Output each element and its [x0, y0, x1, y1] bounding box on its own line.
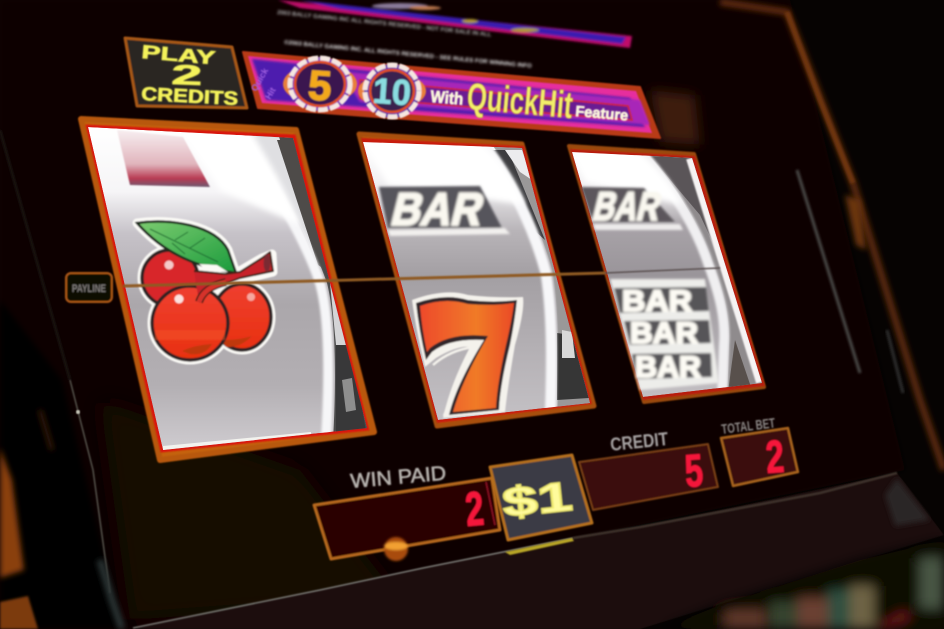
reel window 3: bars [569, 146, 770, 402]
payline [123, 268, 720, 286]
total bet meter: 2 [764, 430, 786, 483]
bar symbol, reel 3: BAR [589, 184, 666, 229]
small top banner [278, 0, 632, 48]
total bet meter [721, 428, 798, 486]
play 2 credits badge: PLAY [141, 42, 217, 69]
total bet label: TOTAL BET [720, 414, 776, 437]
credit meter: 5 [683, 444, 705, 497]
win paid meter: 2 [463, 483, 486, 537]
one dollar denomination badge [490, 455, 592, 540]
play 2 credits badge: CREDITS [141, 84, 239, 110]
triple bar symbol [610, 279, 719, 390]
white outline [137, 221, 273, 360]
reel window 1: cherries [81, 119, 375, 460]
win paid label: WIN PAID [350, 463, 447, 493]
fine print lines: 2003 BALLY GAMING INC ALL RIGHTS RESERVED - NOT FOR SALE IN ALL [277, 10, 492, 39]
credit meter [579, 444, 718, 510]
win paid meter [314, 478, 500, 559]
play 2 credits badge: 2 [171, 59, 203, 91]
fine print lines: ©2003 BALLY GAMING INC. ALL RIGHTS RESERVED - SEE RULES FOR WINNING INFO [284, 39, 532, 70]
glow behind banner end [650, 90, 700, 145]
credit label: CREDIT [609, 429, 669, 455]
quick hit banner: Hit [263, 86, 278, 101]
reel window 2: seven and bar [359, 134, 600, 426]
quick hit banner: QuickHit [465, 76, 575, 127]
right bezel edge [720, 2, 944, 470]
bar symbol, reel 2: BAR [387, 184, 489, 235]
lower bezel ledge [133, 473, 944, 629]
left cabinet edge with orange glow [0, 130, 122, 629]
5 medallion: 5 [307, 61, 333, 110]
triple bar symbol: BAR [635, 351, 701, 384]
play 2 credits badge [125, 38, 247, 110]
quick hit banner [243, 52, 660, 138]
orange indicator light [384, 537, 408, 561]
10 medallion: 10 [372, 70, 412, 113]
quick hit banner: With [430, 87, 464, 109]
fine print lines [277, 10, 532, 70]
5 medallion [283, 57, 357, 111]
coloured reflections at bottom right [660, 540, 944, 629]
quick hit banner: Feature [575, 103, 629, 125]
quick hit banner: Quick [249, 65, 271, 93]
red seven symbol [412, 292, 523, 418]
10 medallion [358, 64, 426, 118]
cherry symbol [137, 221, 273, 360]
reel gap [249, 136, 367, 432]
triple bar symbol: BAR [622, 285, 692, 318]
one dollar denomination badge: $1 [500, 473, 575, 526]
payline tag: PAYLINE [72, 283, 106, 295]
payline tag [66, 273, 112, 302]
triple bar symbol: BAR [630, 317, 698, 350]
